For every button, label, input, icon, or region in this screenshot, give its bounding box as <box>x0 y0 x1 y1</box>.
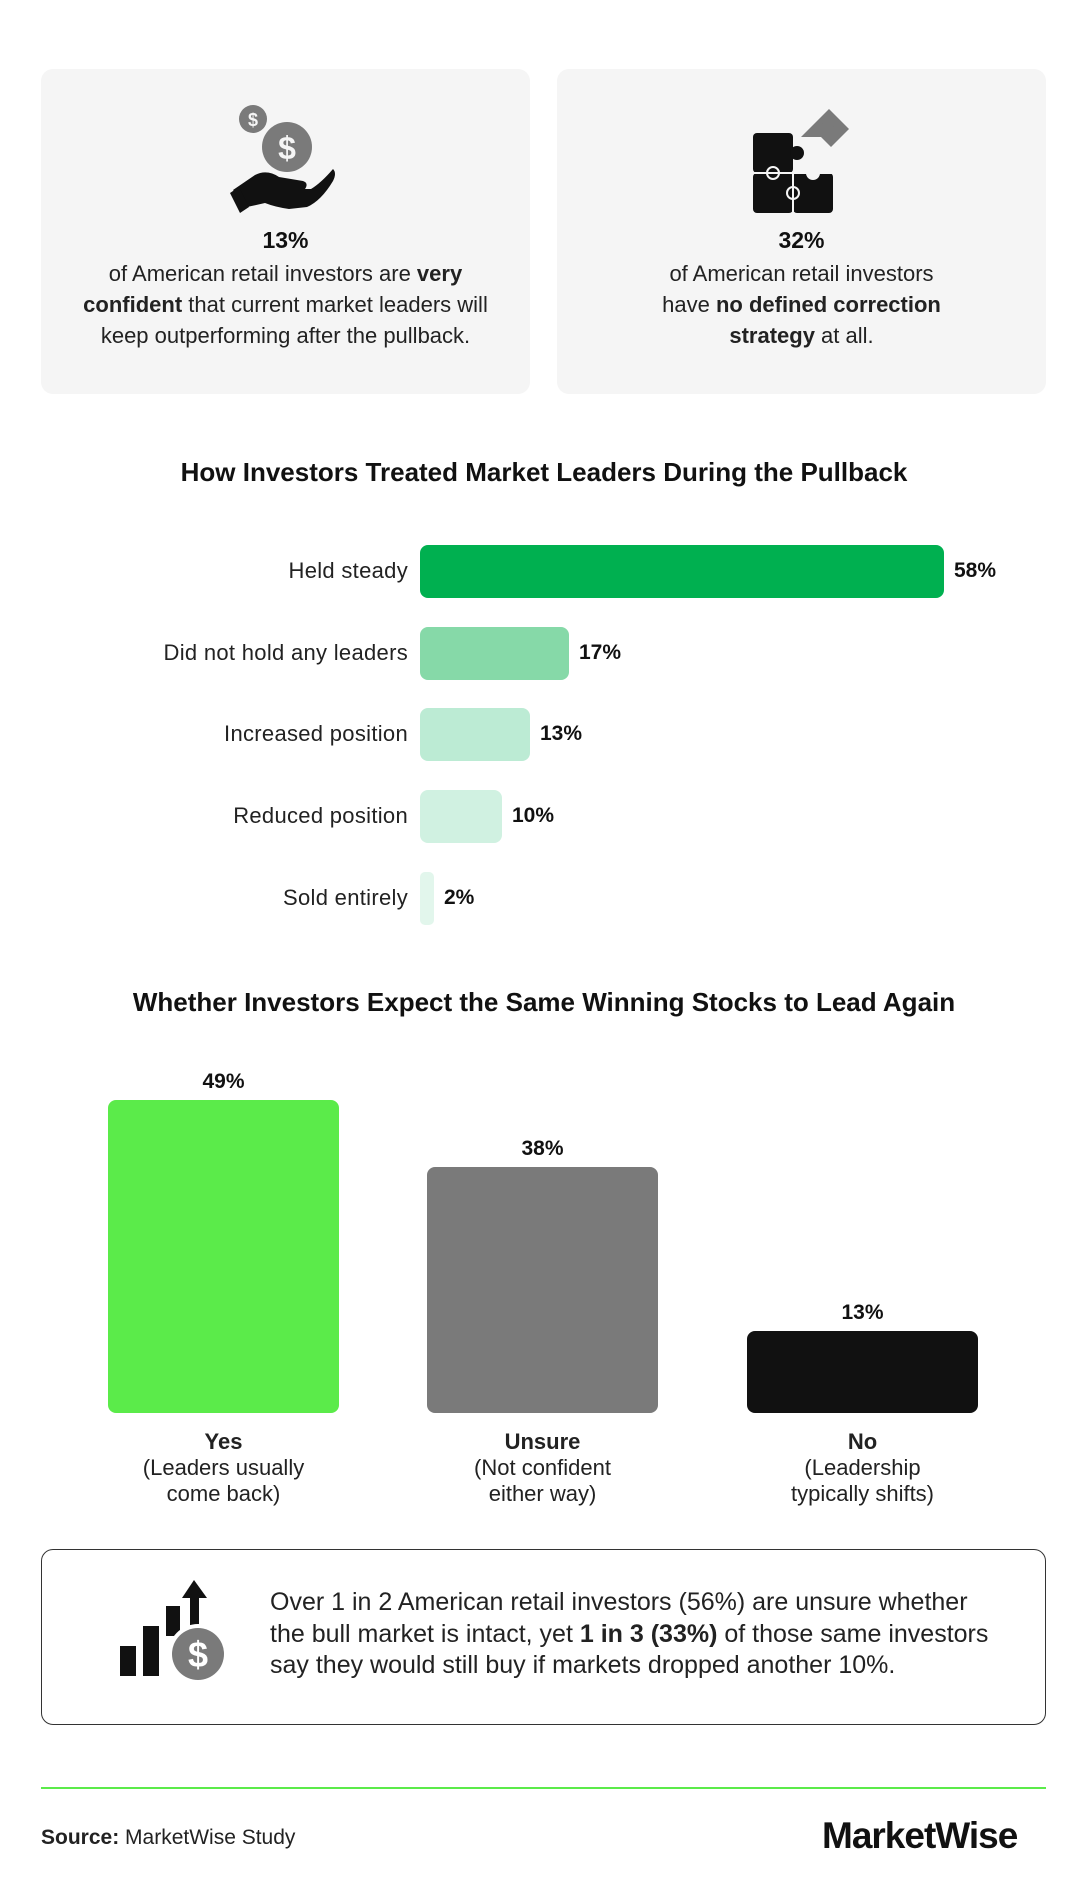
column: no: (Leadership <box>804 1455 921 1480</box>
column: unsure: either way) <box>489 1481 596 1506</box>
heading: market leaders chart: How Investors Treated Market Leaders During the Pullback <box>181 457 907 487</box>
panel: confidence stat <box>41 69 530 394</box>
text: source: Source: MarketWise Study <box>41 1826 295 1849</box>
logo: MarketWise: MarketWise <box>822 1815 1017 1856</box>
icon: growth bars with dollar: $ <box>188 1634 208 1675</box>
bar: held steady: Held steady <box>289 558 408 583</box>
column chart: expectations <box>108 1070 978 1506</box>
bar: did not hold: 17% <box>579 641 621 664</box>
bar: reduced <box>233 790 554 843</box>
text: callout body <box>270 1588 988 1679</box>
bar: sold: Sold entirely <box>283 885 408 910</box>
bar: sold <box>283 872 474 925</box>
column: yes: Yes <box>205 1429 242 1454</box>
bar: increased <box>224 708 582 761</box>
text: strategy description: strategy at all. <box>729 323 874 348</box>
column: no <box>747 1301 978 1506</box>
column: yes: come back) <box>167 1481 280 1506</box>
bar: reduced: Reduced position <box>233 803 408 828</box>
text: confidence description <box>83 261 488 348</box>
column: yes: (Leaders usually <box>143 1455 304 1480</box>
text: 32%: 32% <box>778 227 825 253</box>
column: no: 13% <box>841 1301 884 1324</box>
column: no: No <box>848 1429 877 1454</box>
bar: sold: 2% <box>444 886 474 909</box>
text: strategy description <box>662 261 941 348</box>
text: strategy description: of American retail investors <box>669 261 934 286</box>
column: no: typically shifts) <box>791 1481 934 1506</box>
panel: correction strategy stat <box>557 69 1046 394</box>
icon: hand with coins: $ <box>278 130 296 166</box>
text: confidence description: keep outperforming after the pullback. <box>101 323 470 348</box>
text: confidence description: confident that current market leaders will <box>83 292 488 317</box>
icon: hand with coins: $ <box>248 110 258 130</box>
bar: increased: 13% <box>540 722 582 745</box>
column: unsure: (Not confident <box>474 1455 611 1480</box>
bar chart: treatment of leaders <box>164 545 996 925</box>
bar: did not hold: Did not hold any leaders <box>164 640 408 665</box>
text: callout body: say they would still buy if markets dropped another 10%. <box>270 1651 895 1679</box>
bar: did not hold <box>164 627 621 680</box>
bar: reduced: 10% <box>512 804 554 827</box>
bar: held steady <box>289 545 996 598</box>
text: strategy description: have no defined correction <box>662 292 941 317</box>
text: 13%: 13% <box>262 227 309 253</box>
icon: hand with coins <box>230 105 335 213</box>
bar: held steady: 58% <box>954 559 996 582</box>
heading: expectation chart: Whether Investors Expect the Same Winning Stocks to Lead Again <box>133 987 955 1017</box>
icon: puzzle <box>753 109 849 213</box>
column: yes: 49% <box>202 1070 245 1093</box>
column: unsure <box>427 1137 658 1506</box>
column: unsure: 38% <box>521 1137 564 1160</box>
text: callout body: Over 1 in 2 American retail investors (56%) are unsure whether <box>270 1588 968 1616</box>
text: confidence description: of American retail investors are very <box>109 261 462 286</box>
callout: bull market insight <box>41 1549 1046 1725</box>
bar: increased: Increased position <box>224 721 408 746</box>
icon: growth bars with dollar <box>120 1580 224 1680</box>
column: unsure: Unsure <box>505 1429 580 1454</box>
text: callout body: the bull market is intact, yet 1 in 3 (33%) of those same investors <box>270 1620 988 1648</box>
column: yes <box>108 1070 339 1506</box>
